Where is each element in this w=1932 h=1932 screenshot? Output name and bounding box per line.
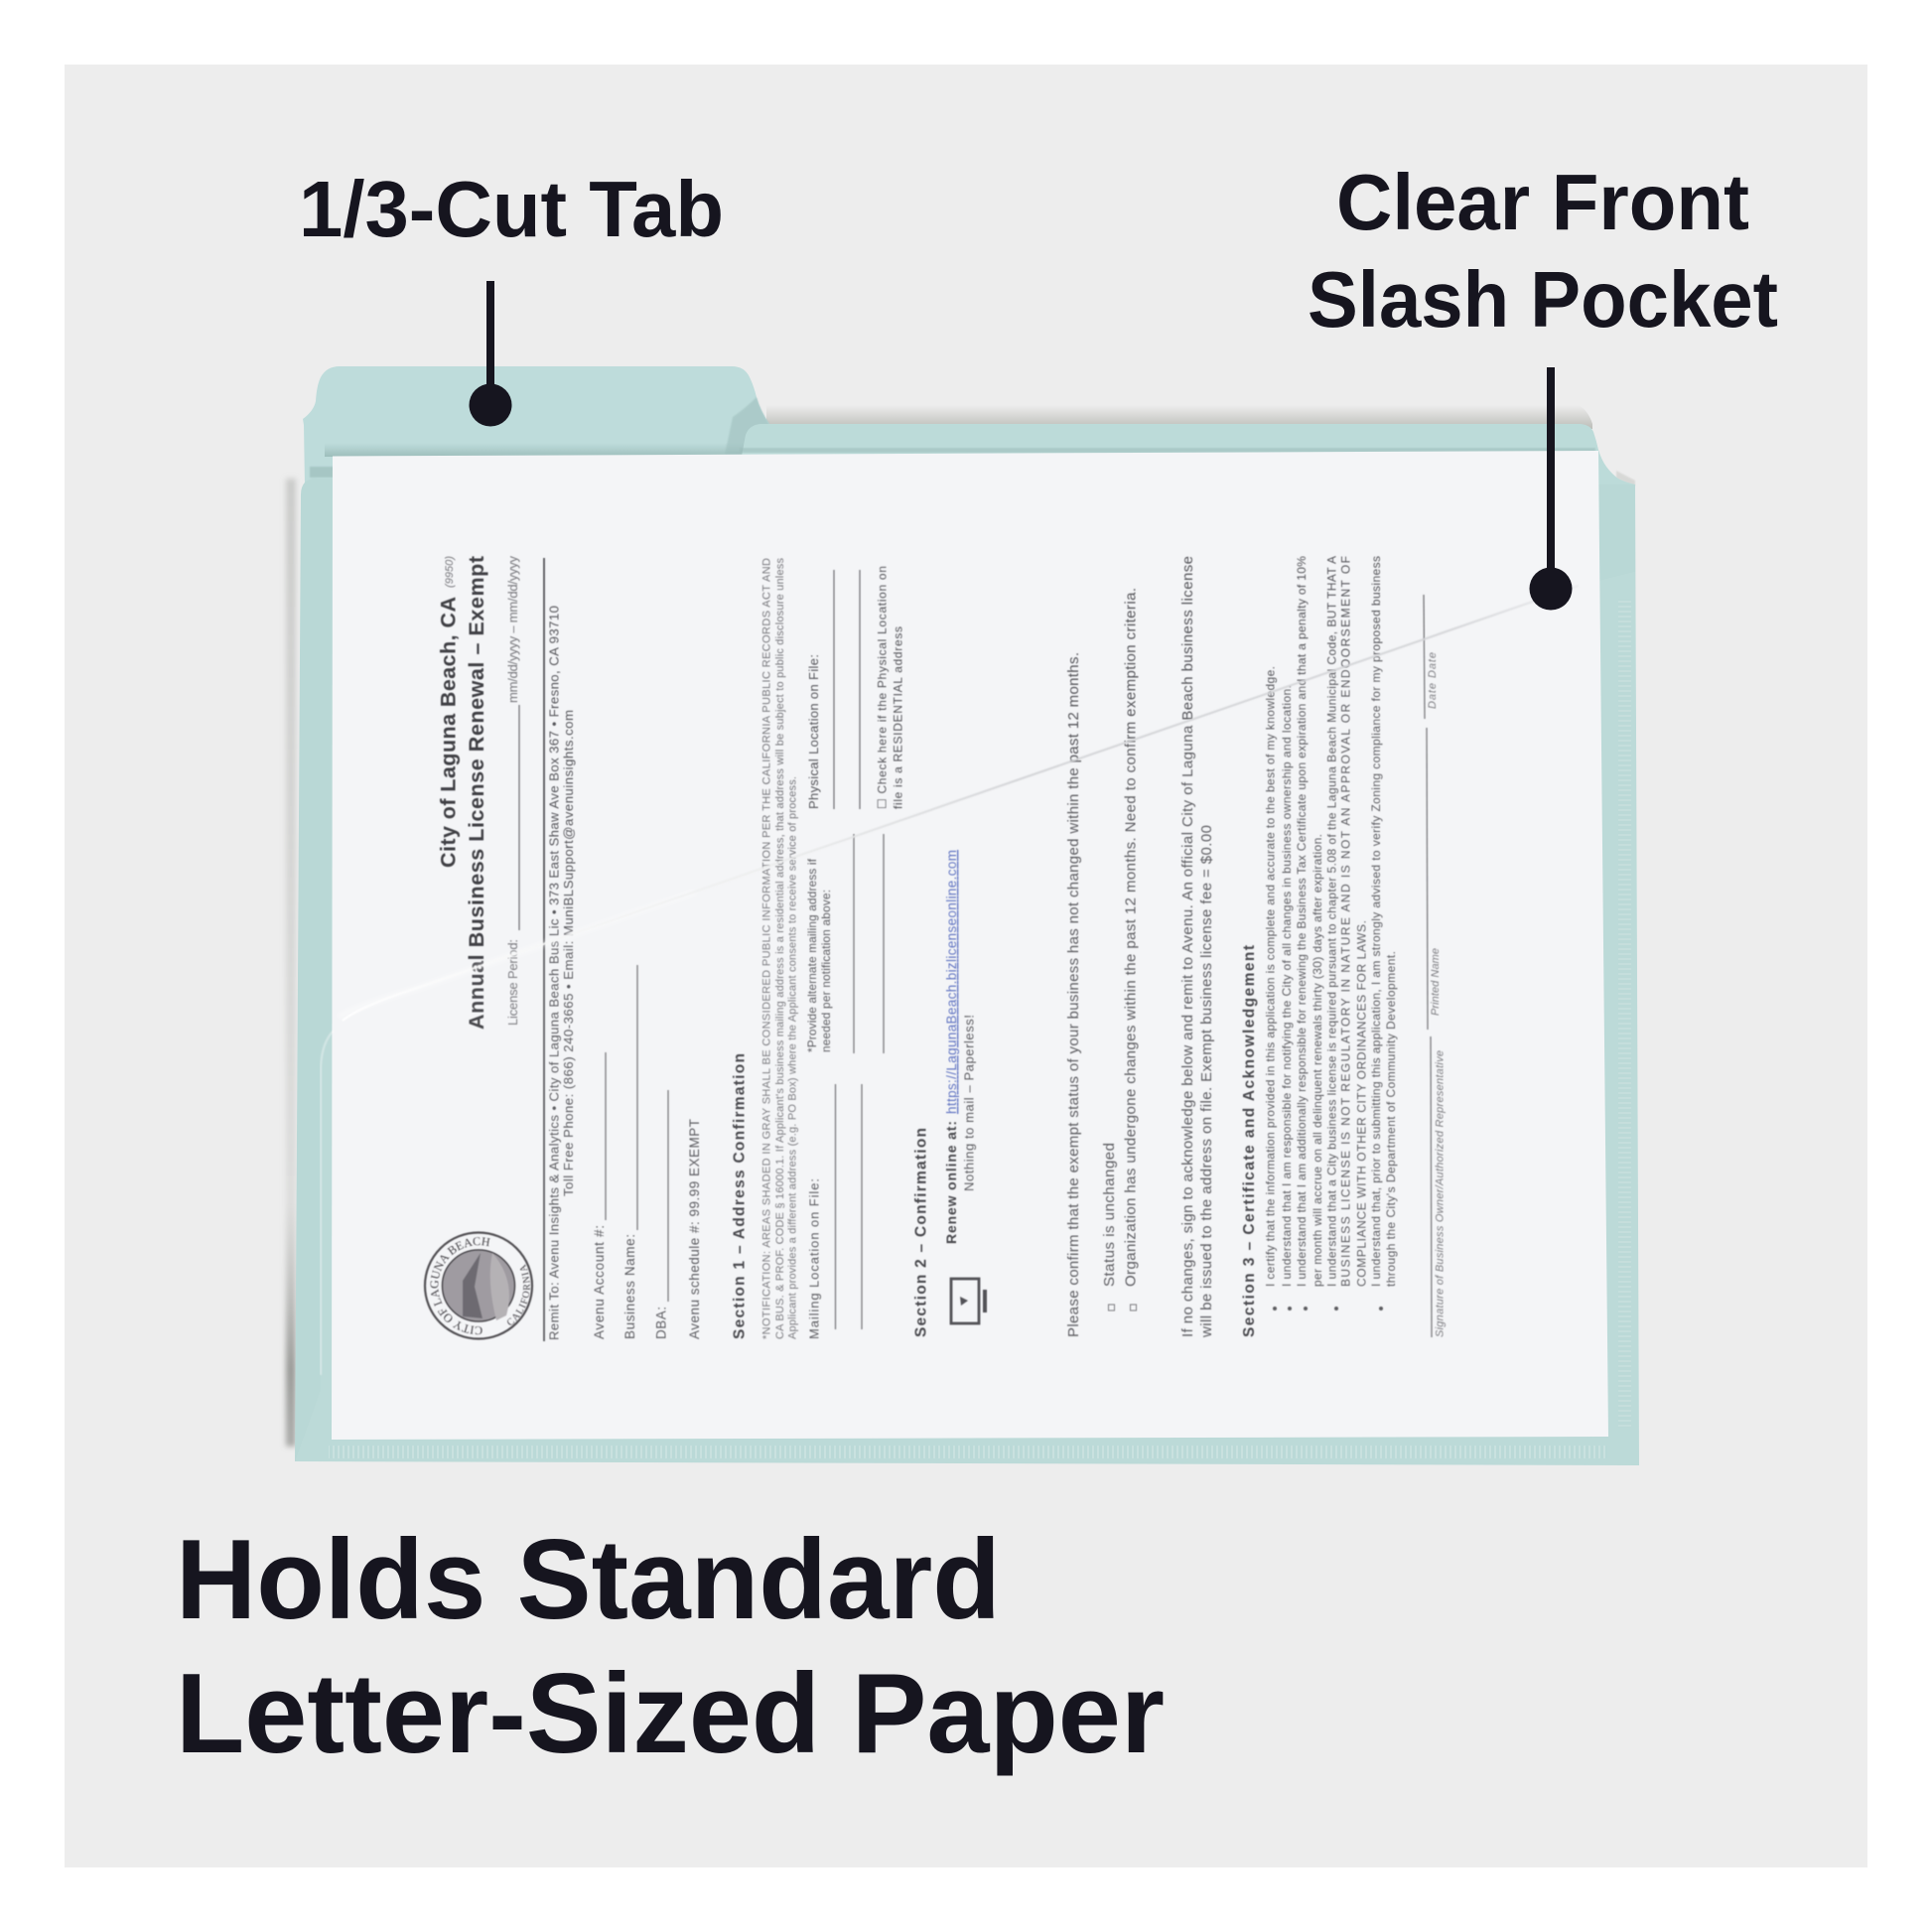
- main caption: Letter-Sized Paper: [176, 1651, 1165, 1777]
- back folder with 1/3-cut tab: [303, 366, 769, 486]
- shoulder shadow on background: [1616, 471, 1635, 486]
- section 1: [731, 558, 905, 1339]
- confirmation options: will be issued to the address on file. Exempt business license fee = $0.00: [1198, 825, 1215, 1338]
- section 3: per month will accrue on all delinquent renewals thirty (30) days after expiration.: [1311, 834, 1324, 1287]
- signature lines: Date Date: [1427, 652, 1439, 709]
- account fields: Business Name:: [622, 1234, 637, 1339]
- section 2: Section 2 – Confirmation: [913, 1128, 930, 1337]
- section 1: needed per notification above:: [819, 890, 833, 1052]
- document title: Annual Business License Renewal – Exempt: [465, 556, 488, 1030]
- paper shadow on tab: [325, 443, 747, 457]
- remit to: Toll Free Phone: (866) 240-3665 • Email: MuniBLSupport@avenuinsights.com: [561, 710, 576, 1196]
- second tab: [740, 424, 1635, 596]
- section 2: https://LagunaBeach.bizlicenseonline.com: [944, 850, 959, 1114]
- signature lines: [1424, 595, 1446, 1337]
- section 3: I understand that I am additionally responsible for renewing the Business Tax Certificate upon expiration and that a penalty of 10%: [1295, 556, 1309, 1287]
- city seal: CALIFORNIA: [506, 1263, 530, 1326]
- folder with paper: [282, 366, 1639, 1465]
- section 3: I understand that, prior to submitting this application, I am strongly advised to verify Zoning compliance for my proposed business: [1369, 556, 1383, 1287]
- confirmation options: Organization has undergone changes within the past 12 months. Need to confirm exemption criteria.: [1122, 588, 1140, 1287]
- section 2: [913, 850, 977, 1337]
- section 2: Renew online at:: [943, 1121, 959, 1244]
- section 1: *Provide alternate mailing address if: [805, 858, 819, 1052]
- section 1: Applicant provides a different address (e.g. PO Box) where the Applicant consents to receive service of process.: [786, 776, 798, 1339]
- second tab left shadow: [725, 397, 769, 457]
- tab shadow on background: [766, 405, 1592, 429]
- bottom ribbed seal strip: [329, 1446, 1607, 1458]
- front folder body: [295, 478, 1639, 1465]
- section 3: Section 3 – Certificate and Acknowledgement: [1241, 945, 1258, 1337]
- signature lines: Printed Name: [1430, 948, 1442, 1016]
- heading: clear front slash pocket: Slash Pocket: [1308, 255, 1778, 344]
- folder left side shadow: [286, 479, 296, 1447]
- document title: City of Laguna Beach, CA: [437, 597, 461, 868]
- clear slash pocket overlay: [295, 571, 1639, 1465]
- section 3: I understand that a City business license is required pursuant to chapter 5.08 of the Laguna Beach Municipal Code, BUT THAT A: [1325, 556, 1339, 1287]
- front folder top shadow: [310, 467, 334, 478]
- section 1: ☐ Check here if the Physical Location on: [876, 566, 890, 809]
- confirmation options: [1065, 556, 1215, 1338]
- paper top shadow: [740, 448, 1595, 453]
- city seal: CITY OF LAGUNA BEACH: [429, 1236, 490, 1335]
- right ribbed seal strip: [1618, 599, 1631, 1428]
- main caption: [176, 1517, 1165, 1777]
- document title: mm/dd/yyyy – mm/dd/yyyy: [505, 556, 520, 703]
- section 3: I understand that I am responsible for notifying the City of all changes in business ownership and location.: [1280, 685, 1294, 1287]
- account fields: [592, 965, 702, 1339]
- section 1: Mailing Location on File:: [806, 1178, 822, 1339]
- confirmation options: Please confirm that the exempt status of your business has not changed within the past 12 months.: [1065, 652, 1082, 1337]
- section 2: Nothing to mail – Paperless!: [961, 1015, 977, 1191]
- glare along slash: [338, 892, 695, 1017]
- city seal: [423, 1231, 534, 1340]
- account fields: Avenu schedule #: 99.99 EXEMPT: [687, 1119, 702, 1339]
- signature lines: Signature of Business Owner/Authorized Representative: [1434, 1050, 1446, 1337]
- pocket left seam: [321, 1031, 334, 1375]
- section 3: through the City's Department of Community Development.: [1384, 951, 1398, 1287]
- section 1: *NOTIFICATION: AREAS SHADED IN GRAY SHALL BE CONSIDERED PUBLIC INFORMATION PER THE CALIFORNIA PUBLIC RECORDS ACT AND: [760, 558, 772, 1339]
- document title: (9950): [444, 556, 456, 588]
- section 1: CA BUS. & PROF. CODE § 16000.1. If Applicant's business mailing address is a residential address, that address will be subject to public disclosure unless: [774, 558, 786, 1339]
- section 3: I certify that the information provided in this application is complete and accurate to the best of my knowledge.: [1264, 666, 1278, 1287]
- callout line and dot: pocket: [1529, 367, 1573, 610]
- printed document text: [423, 555, 1447, 1342]
- section 1: Section 1 – Address Confirmation: [731, 1053, 749, 1339]
- confirmation options: Status is unchanged: [1101, 1143, 1118, 1287]
- document title: [437, 556, 544, 1341]
- remit to: [546, 606, 576, 1340]
- section 3: [1241, 556, 1398, 1337]
- heading: clear front slash pocket: [1308, 158, 1778, 344]
- heading: clear front slash pocket: Clear Front: [1336, 158, 1749, 246]
- main caption: Holds Standard: [176, 1517, 1001, 1643]
- pocket slash crease: [343, 586, 1579, 1021]
- account fields: DBA:: [653, 1307, 669, 1339]
- icon: monitor: [951, 1279, 985, 1323]
- section 3: BUSINESS LICENSE IS NOT REGULATORY IN NATURE AND IS NOT AN APPROVAL OR ENDOORSEMENT OF: [1338, 556, 1352, 1287]
- confirmation options: If no changes, sign to acknowledge below and remit to Avenu. An official City of Laguna Beach business license: [1179, 556, 1196, 1337]
- section 1: Physical Location on File:: [806, 654, 821, 809]
- heading: 1/3-cut tab: 1/3-Cut Tab: [299, 165, 724, 253]
- sheet of paper: [332, 451, 1608, 1440]
- callout line and dot: tab: [469, 281, 512, 427]
- account fields: Avenu Account #:: [592, 1225, 607, 1339]
- section 3: COMPLIANCE WITH OTHER CITY ORDINANCES FOR LAWS.: [1354, 920, 1368, 1287]
- remit to: Remit To: Avenu Insights & Analytics • City of Laguna Beach Bus Lic • 373 East Shaw Ave Box 367 • Fresno, CA 93710: [546, 606, 562, 1340]
- document title: License Period:: [505, 939, 520, 1026]
- section 1: file is a RESIDENTIAL address: [892, 626, 905, 809]
